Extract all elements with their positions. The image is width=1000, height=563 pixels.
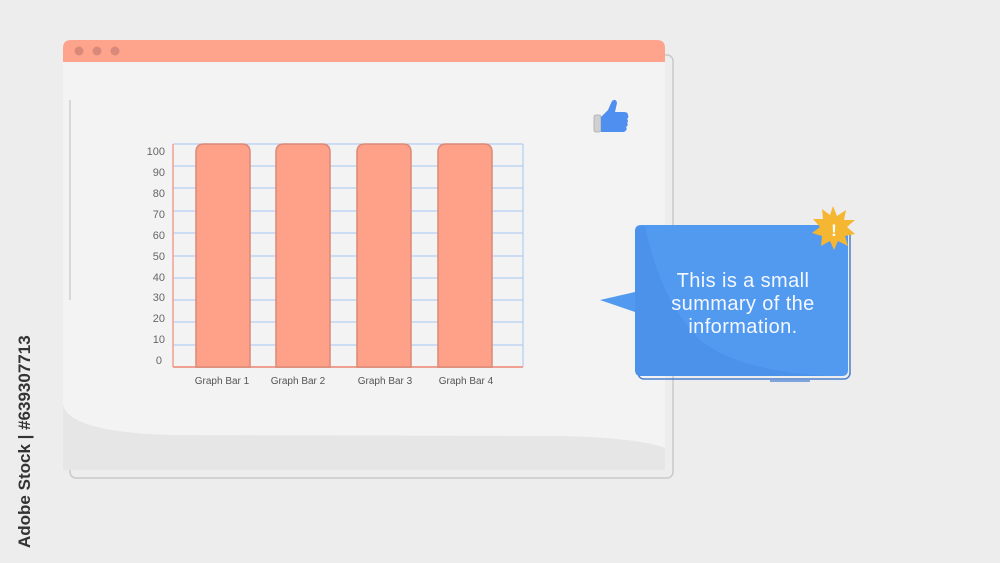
vertical stock id text: Adobe Stock | #639307713 (15, 335, 34, 548)
bars (196, 144, 492, 367)
x axis labels: Graph Bar 4 (439, 376, 494, 387)
window (63, 40, 665, 470)
window header (63, 40, 665, 62)
callout: summary bubble: summary of the (671, 293, 815, 315)
icon: alert starburst (812, 206, 855, 250)
y axis labels: 40 (153, 272, 165, 284)
callout: summary bubble: This is a small (677, 270, 809, 292)
callout: summary bubble: information. (688, 316, 798, 338)
y axis labels: 50 (153, 251, 165, 263)
y axis labels: 70 (153, 209, 165, 221)
y axis labels: 100 (147, 146, 165, 158)
y axis labels: 20 (153, 313, 165, 325)
x axis labels: Graph Bar 1 (195, 376, 250, 387)
x axis labels: Graph Bar 3 (358, 376, 413, 387)
window frame outline (70, 55, 673, 478)
y axis labels: 10 (153, 334, 165, 346)
bar chart (147, 144, 523, 387)
y axis labels: 30 (153, 292, 165, 304)
icon: alert starburst: ! (831, 221, 837, 240)
x axis labels (195, 376, 494, 387)
x axis labels: Graph Bar 2 (271, 376, 326, 387)
y axis labels: 60 (153, 230, 165, 242)
y axis labels: 80 (153, 188, 165, 200)
callout: summary bubble (600, 225, 850, 381)
y axis labels: 0 (156, 355, 162, 367)
y axis labels (147, 146, 165, 367)
icon: thumbs up (594, 100, 628, 132)
y axis labels: 90 (153, 167, 165, 179)
